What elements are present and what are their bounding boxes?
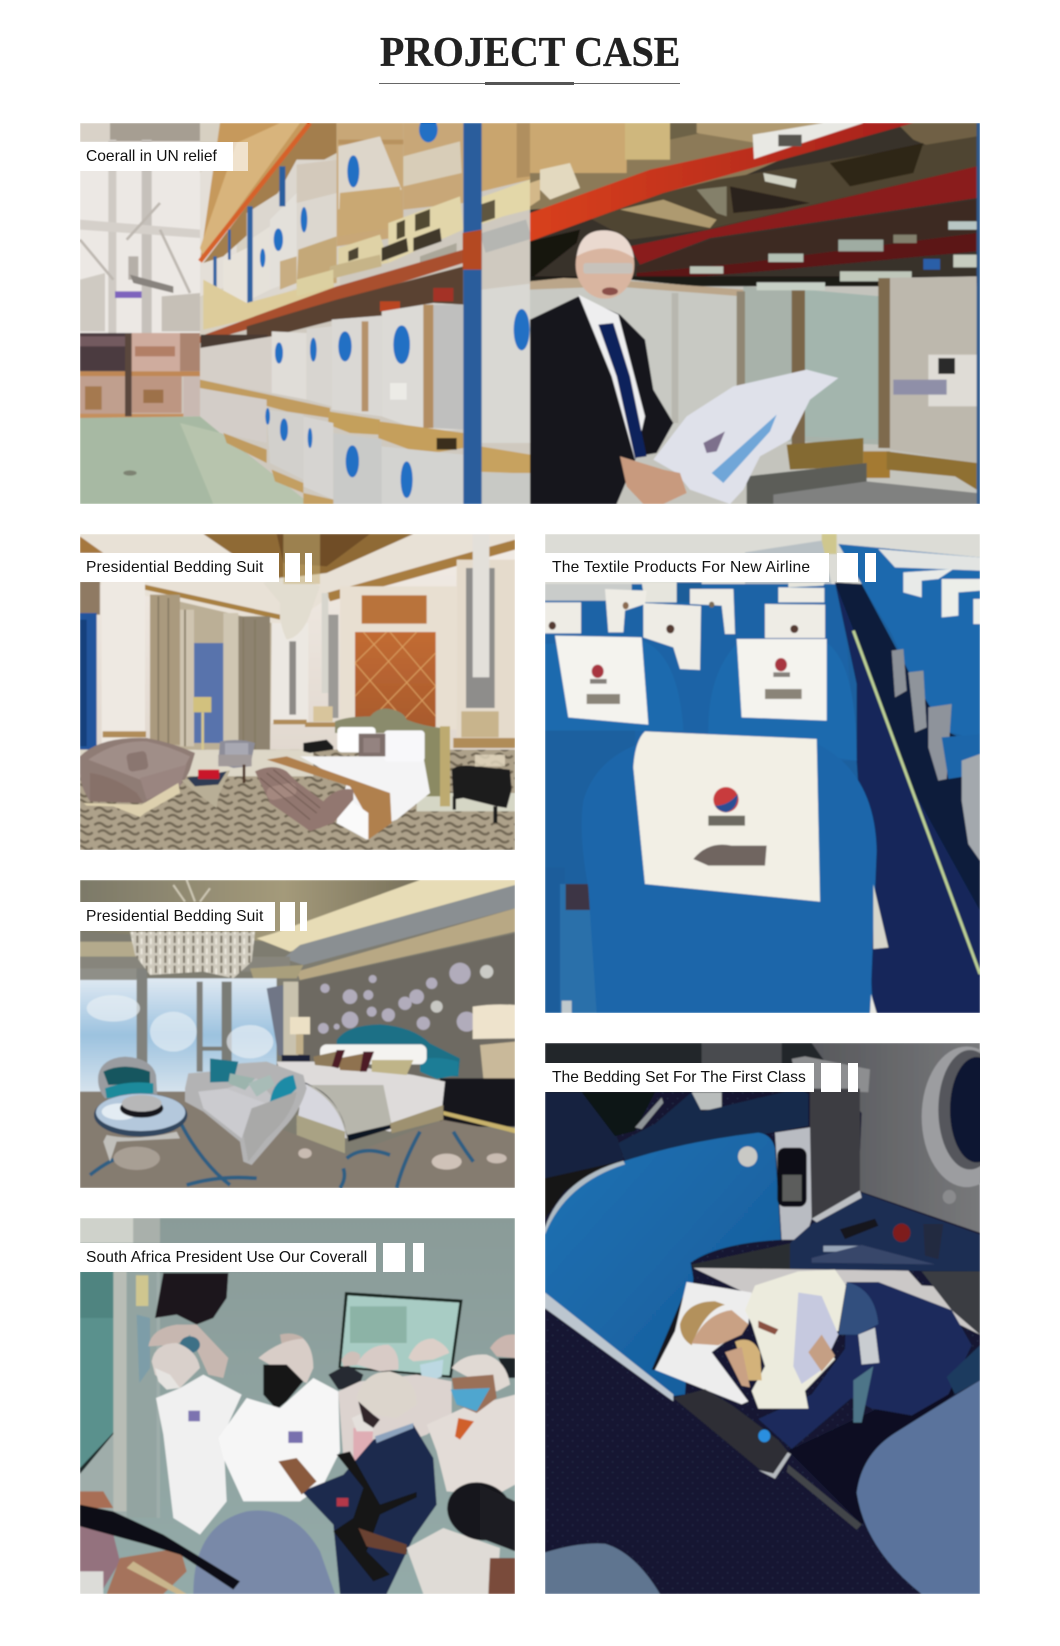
label: Presidential Bedding Suit: Presidential Bedding Suit <box>86 908 264 925</box>
label: The Bedding Set For The First Class: The Bedding Set For The First Class <box>552 1069 806 1086</box>
label: South Africa President Use Our Coverall <box>80 1243 376 1272</box>
label: The Bedding Set For The First Class <box>545 1063 814 1092</box>
panel: Presidential Bedding Suit (teal headboard) <box>80 880 515 1188</box>
decorative label stripe <box>233 142 248 171</box>
label: Coerall in UN relief <box>80 142 233 171</box>
panel: The Bedding Set For The First Class <box>545 1043 980 1594</box>
decorative label stripes <box>280 902 307 931</box>
label: South Africa President Use Our Coverall: South Africa President Use Our Coverall <box>86 1249 367 1266</box>
photo: first-class seat with woman sleeping under navy blanket <box>545 1043 980 1594</box>
panel: Coerall in UN relief <box>80 123 980 504</box>
label: Coerall in UN relief: Coerall in UN relief <box>86 148 217 165</box>
decorative label stripes <box>837 553 876 582</box>
decorative label stripes <box>285 553 312 582</box>
label: Presidential Bedding Suit: Presidential Bedding Suit <box>86 559 264 576</box>
panel: Presidential Bedding Suit (orange headboard) <box>80 534 515 850</box>
label: The Textile Products For New Airline: The Textile Products For New Airline <box>552 559 810 576</box>
panel: The Textile Products For New Airline <box>545 534 980 1013</box>
panel: South Africa President Use Our Coverall <box>80 1218 515 1594</box>
label: The Textile Products For New Airline <box>545 553 829 582</box>
photo: cream and gold hotel bedroom <box>80 534 515 850</box>
photo: hotel suite with teal headboard and sea view <box>80 880 515 1188</box>
label: Presidential Bedding Suit <box>80 902 275 931</box>
decorative label stripes <box>821 1063 858 1092</box>
title: PROJECT CASE <box>380 28 680 75</box>
man holding coverall bag <box>530 230 838 504</box>
decorative label stripes <box>383 1243 424 1272</box>
photo: warehouse with man holding coverall bag <box>80 123 980 504</box>
title underline <box>379 82 680 85</box>
label: Presidential Bedding Suit <box>80 553 279 582</box>
photo: group in white coveralls and hairnets <box>80 1218 515 1594</box>
photo: aircraft cabin blue seats with white headrests <box>545 534 980 1013</box>
